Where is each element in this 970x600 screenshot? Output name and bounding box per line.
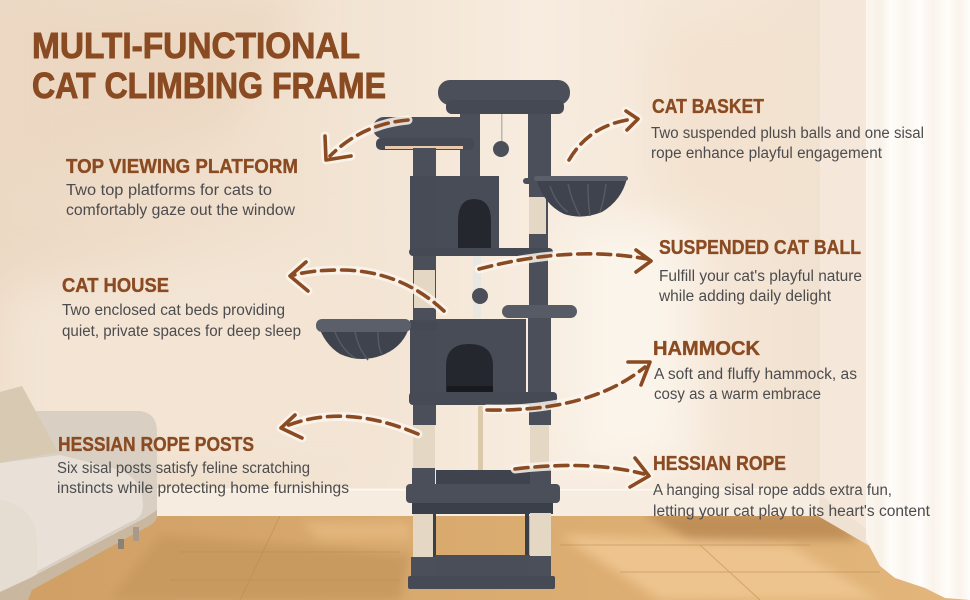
curtains (866, 0, 970, 600)
arrow: hessian rope posts (281, 415, 418, 438)
base (408, 555, 555, 589)
lower sisal posts (413, 513, 551, 558)
arrow: suspended cat ball (479, 250, 651, 272)
callout: hessian rope: letting your cat play to its heart's content (653, 503, 931, 520)
callout: hammock: A soft and fluffy hammock, as (654, 366, 857, 383)
sofa (0, 386, 157, 600)
callout: hessian rope: HESSIAN ROPE (653, 453, 786, 475)
upper left sisal post (413, 256, 436, 320)
callout: hessian rope posts: HESSIAN ROPE POSTS (58, 434, 254, 456)
callout: suspended cat ball: while adding daily delight (658, 288, 832, 305)
callout: suspended cat ball: SUSPENDED CAT BALL (659, 237, 861, 259)
callout: hessian rope posts: Six sisal posts satisfy feline scratching (57, 460, 310, 477)
title: CAT CLIMBING FRAME (32, 65, 386, 106)
back posts and hanging toys (460, 110, 551, 318)
arrow: cat basket (569, 111, 638, 160)
callout: cat basket: Two suspended plush balls and one sisal (651, 125, 924, 142)
callout: suspended cat ball: Fulfill your cat's playful nature (659, 268, 862, 285)
callout: suspended cat ball (658, 237, 862, 305)
callout: cat house (62, 275, 301, 340)
callout: cat basket: rope enhance playful engagement (651, 145, 883, 162)
callout: hammock: cosy as a warm embrace (654, 386, 821, 403)
callout: hammock: HAMMOCK (653, 338, 761, 360)
arrow: cat house (290, 262, 444, 311)
upper cat house (410, 148, 499, 250)
title (32, 25, 386, 106)
callout: hessian rope (653, 453, 931, 520)
lower cat house (410, 319, 526, 396)
large shelf (406, 470, 560, 514)
arrow: hammock (487, 362, 650, 410)
cat tree (316, 80, 628, 589)
middle shelf (409, 392, 557, 405)
small round platform (502, 305, 577, 394)
callout: top viewing platform (66, 156, 298, 219)
callout: hessian rope posts (57, 434, 349, 497)
top platform (438, 80, 570, 114)
cat basket (523, 176, 628, 217)
callout: top viewing platform: Two top platforms for cats to (66, 182, 272, 199)
upper shelf (409, 248, 553, 256)
hammock (316, 319, 438, 360)
middle sisal posts (412, 405, 551, 488)
callout: top viewing platform: comfortably gaze out the window (66, 202, 296, 219)
arrow: top viewing platform (325, 120, 408, 160)
callout: cat house: Two enclosed cat beds providing (62, 302, 285, 319)
callout: hessian rope posts: instincts while protecting home furnishings (57, 480, 349, 497)
callout: cat house: quiet, private spaces for deep sleep (62, 323, 301, 340)
callout: top viewing platform: TOP VIEWING PLATFORM (66, 156, 298, 178)
callout: cat basket (651, 96, 924, 162)
callout: cat house: CAT HOUSE (62, 275, 169, 297)
title: MULTI-FUNCTIONAL (32, 25, 360, 66)
hanging sisal rope (478, 406, 483, 473)
callout: cat basket: CAT BASKET (652, 96, 764, 118)
callout: hammock (653, 338, 857, 403)
arrow: hessian rope (515, 458, 649, 487)
callout: hessian rope: A hanging sisal rope adds extra fun, (653, 482, 892, 499)
second platform (373, 117, 477, 150)
